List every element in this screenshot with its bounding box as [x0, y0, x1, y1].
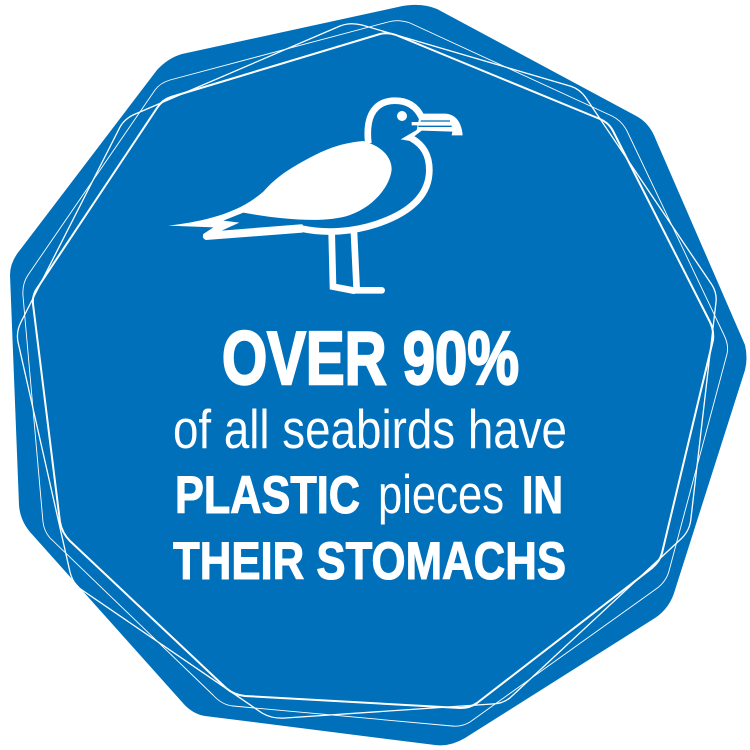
- beak slit: [418, 120, 452, 127]
- head outline: [368, 101, 422, 143]
- body outline: [302, 138, 429, 232]
- text block: line three: [175, 463, 563, 525]
- beak: [401, 114, 463, 143]
- icon: seagull: [168, 101, 463, 291]
- wing and tail: [168, 141, 392, 240]
- word: IN: IN: [522, 466, 563, 525]
- text block: line four: THEIR STOMACHS: [173, 532, 566, 591]
- beak centre line: [412, 122, 450, 125]
- word: PLASTIC: PLASTIC: [175, 466, 360, 525]
- legs and foot: [332, 233, 382, 291]
- eye: [397, 111, 407, 121]
- word: pieces: pieces: [378, 463, 504, 525]
- text block: line two: of all seabirds have: [173, 398, 567, 460]
- text block: headline: OVER 90%: [222, 316, 519, 400]
